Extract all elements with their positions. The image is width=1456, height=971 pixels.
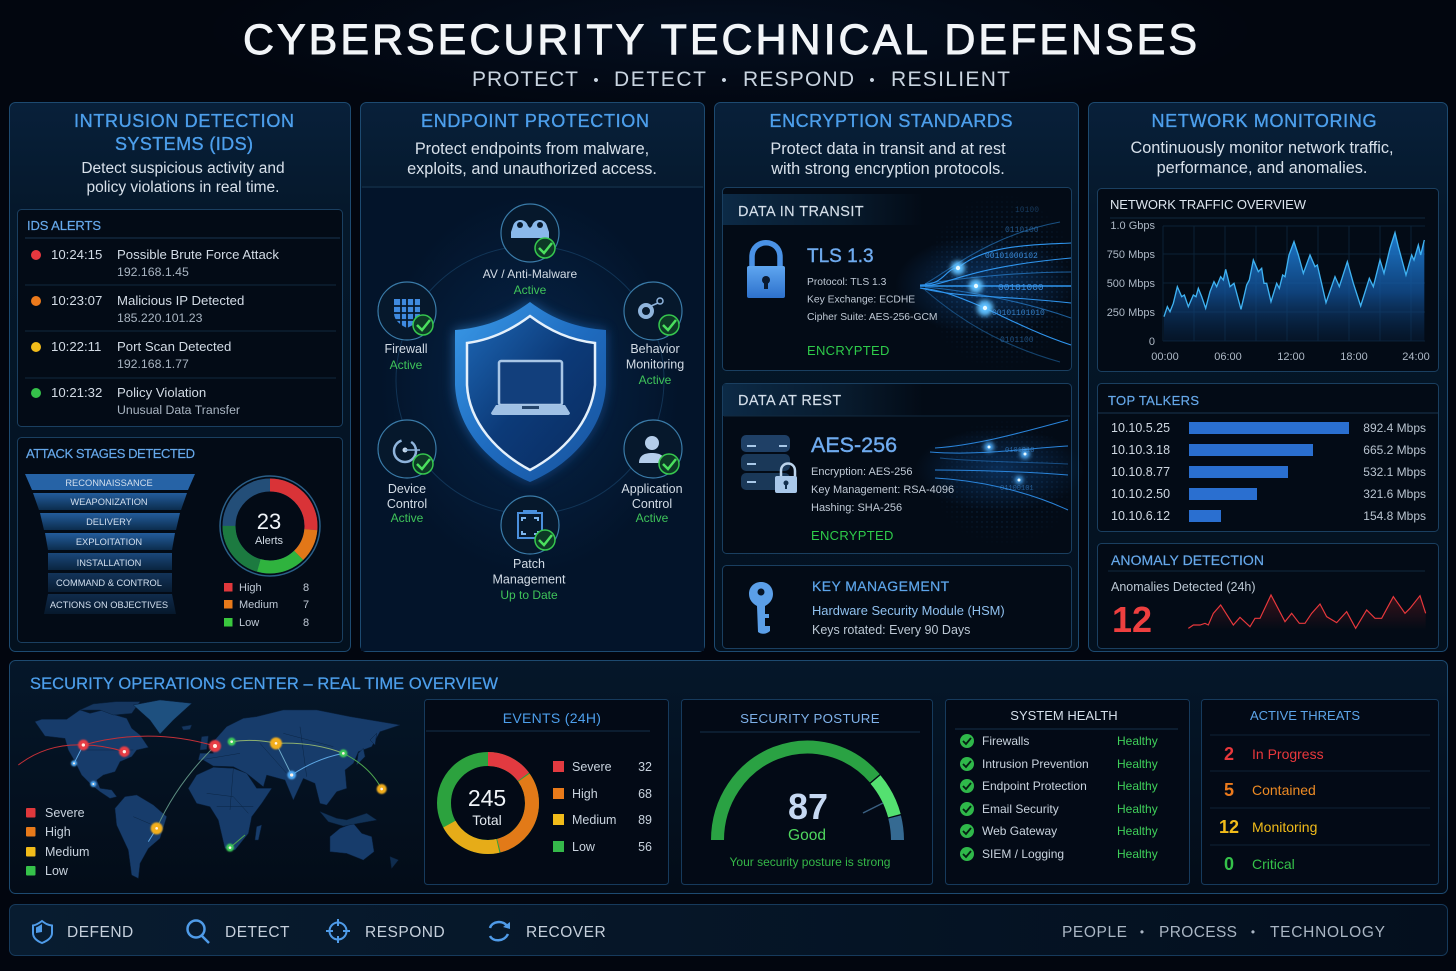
bar chart: top talkers: 10.10.5.25 <box>1111 421 1170 435</box>
description: encryption: with strong encryption protocols. <box>770 160 1005 178</box>
heading: IDS: SYSTEMS (IDS) <box>115 134 253 154</box>
alert row: port scan: 192.168.1.77 <box>117 357 189 371</box>
list: system status: Healthy <box>1117 847 1158 861</box>
card heading: system health: SYSTEM HEALTH <box>1010 708 1118 723</box>
endpoint node: patch management <box>493 496 566 602</box>
AES details: Encryption: AES-256 <box>811 466 913 478</box>
endpoint node: patch management: Patch <box>513 557 545 571</box>
key management heading: KEY MANAGEMENT <box>812 578 950 594</box>
legend: alerts: High <box>239 582 262 594</box>
anomaly count: 12 <box>1112 599 1152 640</box>
area chart: network traffic: 750 Mbps <box>1107 249 1155 261</box>
endpoint node: behavior monitoring: Active <box>639 373 672 387</box>
bar chart: top talkers: 154.8 Mbps <box>1363 509 1426 523</box>
subtitle: • <box>721 72 727 89</box>
funnel: attack stages <box>25 474 195 614</box>
subtitle: PROTECT <box>472 68 578 91</box>
heading: endpoint: ENDPOINT PROTECTION <box>421 111 649 131</box>
icon: database with padlock <box>741 435 797 493</box>
card: key management: Keys rotated: Every 90 Days <box>812 623 970 637</box>
icon: respond crosshair <box>326 919 350 943</box>
subtitle: • <box>593 72 599 89</box>
donut centre value: 23 <box>257 509 281 534</box>
legend: map severity: High <box>45 825 71 839</box>
threat row: contained: Contained <box>1252 782 1316 798</box>
donut chart: events <box>444 759 532 847</box>
legend: events: High <box>572 787 598 801</box>
legend: alerts: 7 <box>303 599 309 611</box>
funnel: attack stages: ACTIONS ON OBJECTIVES <box>50 600 168 610</box>
alert row: port scan: Port Scan Detected <box>117 339 231 354</box>
legend: events: Severe <box>572 760 612 774</box>
posture score: 87 <box>788 786 828 827</box>
visual: data streams at rest: 0101010 <box>1005 447 1034 455</box>
card heading: data in transit: DATA IN TRANSIT <box>738 204 864 220</box>
visual: data streams in transit: 00101000 <box>998 282 1044 293</box>
area chart: network traffic: 18:00 <box>1340 351 1368 363</box>
donut centre label: Alerts <box>255 535 284 547</box>
endpoint node: application control: Application <box>621 482 683 496</box>
legend: events: 56 <box>638 840 652 854</box>
world map with threat arcs <box>18 700 400 878</box>
alert row: brute force: 192.168.1.45 <box>117 265 189 279</box>
description: endpoint: exploits, and unauthorized access. <box>407 160 657 178</box>
visual: data streams in transit: 00101101010 <box>992 309 1045 318</box>
tagline: PROCESS <box>1159 924 1237 941</box>
card: events 24h <box>424 700 668 884</box>
list: system status: Healthy <box>1117 779 1158 793</box>
card heading: attack stages: ATTACK STAGES DETECTED <box>26 446 195 461</box>
description: IDS: policy violations in real time. <box>87 179 279 196</box>
card: data at rest <box>722 384 1085 554</box>
posture note: Your security posture is strong <box>730 855 890 869</box>
heading: SOC: SECURITY OPERATIONS CENTER – REAL TIME OVERVIEW <box>30 675 498 693</box>
endpoint node: device control <box>378 420 436 525</box>
bar chart: top talkers: 532.1 Mbps <box>1363 465 1426 479</box>
alert row: policy violation: Policy Violation <box>117 385 206 400</box>
icon: defend shield <box>33 921 52 943</box>
threat row: critical: Critical <box>1252 856 1295 872</box>
panel: intrusion detection systems <box>10 102 350 652</box>
alert row: port scan <box>31 339 231 371</box>
legend: alerts: 8 <box>303 582 309 594</box>
area chart: network traffic: 12:00 <box>1277 351 1305 363</box>
panel: encryption standards <box>714 102 1085 652</box>
subtitle <box>472 68 1010 91</box>
endpoint node: behavior monitoring: Monitoring <box>626 358 684 372</box>
icon: recover arrows <box>490 922 510 940</box>
bar chart: top talkers <box>1111 421 1426 523</box>
icon: padlock <box>747 243 785 298</box>
description: endpoint: Protect endpoints from malware, <box>415 140 649 158</box>
card heading: anomaly detection: ANOMALY DETECTION <box>1111 552 1264 568</box>
legend: map severity: Medium <box>45 845 89 859</box>
card: security posture <box>682 700 932 884</box>
status: encrypted at rest: ENCRYPTED <box>811 528 894 543</box>
legend: alerts: Medium <box>239 599 278 611</box>
list: system status <box>960 734 1158 861</box>
legend: events: Medium <box>572 813 616 827</box>
TLS details: Key Exchange: ECDHE <box>807 294 915 306</box>
list: system status: Email Security <box>982 802 1059 816</box>
area chart: network traffic: 250 Mbps <box>1107 307 1155 319</box>
alert row: malicious IP <box>31 293 244 325</box>
threat row: monitoring <box>1219 817 1317 837</box>
legend: events: 89 <box>638 813 652 827</box>
TLS details: Protocol: TLS 1.3 <box>807 277 886 288</box>
endpoint node: firewall <box>378 282 436 372</box>
donut centre label: events: Total <box>472 812 502 828</box>
threat row: critical <box>1224 854 1295 874</box>
alert row: port scan: 10:22:11 <box>51 339 101 354</box>
threat row: critical: 0 <box>1224 854 1234 874</box>
card: active threats <box>1202 700 1438 884</box>
legend: alerts <box>224 582 309 629</box>
funnel: attack stages: EXPLOITATION <box>76 537 142 547</box>
endpoint node: firewall: Firewall <box>384 342 428 356</box>
area chart: network traffic <box>1107 220 1430 363</box>
funnel: attack stages: INSTALLATION <box>77 558 141 568</box>
key management details: Hardware Security Module (HSM) <box>812 603 1005 618</box>
card heading: active threats: ACTIVE THREATS <box>1250 708 1360 723</box>
status: encrypted: ENCRYPTED <box>807 343 890 358</box>
endpoint node: application control: Active <box>636 511 669 525</box>
endpoint node: firewall: Active <box>390 358 423 372</box>
visual: data streams in transit <box>906 202 1072 362</box>
endpoint node: device control: Active <box>391 511 424 525</box>
endpoint node: behavior monitoring: Behavior <box>630 342 680 356</box>
gauge: security posture <box>718 747 898 840</box>
label: detect: DETECT <box>225 924 290 941</box>
alert row: malicious IP: Malicious IP Detected <box>117 293 244 308</box>
title: CYBERSECURITY TECHNICAL DEFENSES <box>243 16 1197 64</box>
posture rating: Good <box>788 827 826 844</box>
sparkline: anomalies <box>1188 595 1426 630</box>
area chart: network traffic: 24:00 <box>1402 351 1430 363</box>
alert row: policy violation: Unusual Data Transfer <box>117 403 240 417</box>
endpoint node: AV / anti-malware <box>483 204 578 297</box>
area chart: network traffic: 1.0 Gbps <box>1110 220 1155 232</box>
footer bar <box>10 904 1448 956</box>
threat row: contained: 5 <box>1224 780 1234 800</box>
threat row: monitoring: Monitoring <box>1252 819 1317 835</box>
tagline <box>1062 924 1385 941</box>
icon: central shield with laptop <box>455 302 606 482</box>
tagline: PEOPLE <box>1062 924 1127 941</box>
card: attack stages detected <box>18 438 342 642</box>
list: system status: Web Gateway <box>982 824 1057 838</box>
legend: events: Low <box>572 840 596 854</box>
list: system status: Endpoint Protection <box>982 779 1087 793</box>
description: encryption: Protect data in transit and at rest <box>770 140 1006 158</box>
TLS heading: TLS 1.3 <box>807 246 874 267</box>
card: key management <box>722 566 1072 648</box>
threat row: in progress: 2 <box>1224 744 1234 764</box>
subtitle: • <box>869 72 875 89</box>
card: IDS alerts <box>18 210 342 426</box>
anomaly caption: Anomalies Detected (24h) <box>1111 580 1256 594</box>
label: respond: RESPOND <box>365 924 445 941</box>
panel: network monitoring <box>1088 102 1448 652</box>
card heading: data at rest: DATA AT REST <box>738 393 842 409</box>
endpoint node: behavior monitoring <box>624 282 684 387</box>
area chart: network traffic: 500 Mbps <box>1107 278 1155 290</box>
heading: IDS <box>74 111 294 154</box>
alert row: malicious IP: 10:23:07 <box>51 293 102 308</box>
AES details: Key Management: RSA-4096 <box>811 484 954 496</box>
card: network traffic overview <box>1098 188 1438 372</box>
endpoint node: patch management: Up to Date <box>500 588 558 602</box>
area chart: network traffic: 06:00 <box>1214 351 1242 363</box>
funnel: attack stages: RECONNAISSANCE <box>65 478 153 488</box>
list: system status: SIEM / Logging <box>982 847 1064 861</box>
subtitle: RESPOND <box>743 68 854 91</box>
card heading: traffic: NETWORK TRAFFIC OVERVIEW <box>1110 197 1307 212</box>
icon: key <box>749 582 773 634</box>
endpoint node: device control: Control <box>387 497 427 511</box>
list: system status: Healthy <box>1117 802 1158 816</box>
alert row: brute force: 10:24:15 <box>51 247 102 262</box>
label: defend: DEFEND <box>67 924 134 941</box>
donut centre value: events: 245 <box>468 785 506 811</box>
legend: events <box>553 760 652 854</box>
funnel: attack stages: DELIVERY <box>86 517 132 527</box>
list: system status: Firewalls <box>982 734 1029 748</box>
donut chart: 23 alerts <box>220 476 320 576</box>
visual: data streams in transit: 10100 <box>1015 206 1039 215</box>
card: system health <box>946 700 1190 884</box>
subtitle: RESILIENT <box>891 68 1010 91</box>
card heading: events: EVENTS (24H) <box>503 710 601 726</box>
threat row: contained <box>1224 780 1316 800</box>
area chart: network traffic: 00:00 <box>1151 351 1179 363</box>
alert row: brute force <box>31 247 279 279</box>
threat row: in progress <box>1224 744 1324 764</box>
description: network: performance, and anomalies. <box>1157 159 1367 177</box>
legend: events: 32 <box>638 760 652 774</box>
legend: alerts: Low <box>239 617 259 629</box>
card: top talkers <box>1098 384 1438 532</box>
legend: map severity: Low <box>45 864 69 878</box>
list: system status: Healthy <box>1117 734 1158 748</box>
alert row: policy violation <box>31 385 240 417</box>
funnel: attack stages: COMMAND & CONTROL <box>56 578 162 588</box>
bar chart: top talkers: 892.4 Mbps <box>1363 421 1426 435</box>
visual: data streams at rest <box>926 420 1073 542</box>
visual: data streams in transit: 0101100 <box>1000 336 1034 345</box>
visual: data streams in transit: 0110100 <box>1005 226 1039 235</box>
AES heading: AES-256 <box>811 433 897 457</box>
tagline: • <box>1140 925 1144 939</box>
card: data in transit <box>722 188 1075 370</box>
list: system status: Healthy <box>1117 824 1158 838</box>
card heading: IDS alerts: IDS ALERTS <box>27 218 101 233</box>
bar chart: top talkers: 10.10.6.12 <box>1111 509 1170 523</box>
subtitle: DETECT <box>614 68 706 91</box>
AES details: Hashing: SHA-256 <box>811 502 902 514</box>
funnel: attack stages: WEAPONIZATION <box>70 497 148 507</box>
tagline: • <box>1251 925 1255 939</box>
panel: endpoint protection <box>360 102 704 652</box>
area chart: network traffic: 0 <box>1149 336 1155 348</box>
legend: map severity: Severe <box>45 806 85 820</box>
threat row: in progress: In Progress <box>1252 746 1324 762</box>
endpoint node: device control: Device <box>388 482 426 496</box>
card heading: top talkers: TOP TALKERS <box>1108 393 1199 408</box>
endpoint node: AV / anti-malware: Active <box>514 283 547 297</box>
legend: alerts: 8 <box>303 617 309 629</box>
heading: encryption: ENCRYPTION STANDARDS <box>770 111 1012 131</box>
list: system status: Intrusion Prevention <box>982 757 1089 771</box>
bar chart: top talkers: 10.10.2.50 <box>1111 487 1170 501</box>
alert row: policy violation: 10:21:32 <box>51 385 102 400</box>
endpoint node: application control: Control <box>632 497 672 511</box>
icon: detect magnifier <box>188 920 209 943</box>
label: recover: RECOVER <box>526 924 606 941</box>
panel: security operations center <box>10 660 1448 894</box>
legend: map severity <box>26 806 89 878</box>
threat row: monitoring: 12 <box>1219 817 1239 837</box>
endpoint node: application control <box>621 420 683 525</box>
visual: data streams at rest: 01100101 <box>1000 485 1034 493</box>
visual: data streams in transit: 00101000102 <box>985 252 1038 261</box>
card heading: posture: SECURITY POSTURE <box>740 711 880 726</box>
bar chart: top talkers: 10.10.3.18 <box>1111 443 1170 457</box>
bar chart: top talkers: 321.6 Mbps <box>1363 487 1426 501</box>
endpoint node: AV / anti-malware: AV / Anti-Malware <box>483 267 578 281</box>
TLS details: Cipher Suite: AES-256-GCM <box>807 312 937 323</box>
bar chart: top talkers: 10.10.8.77 <box>1111 465 1170 479</box>
bar chart: top talkers: 665.2 Mbps <box>1363 443 1426 457</box>
legend: events: 68 <box>638 787 652 801</box>
alert row: brute force: Possible Brute Force Attack <box>117 247 279 262</box>
tagline: TECHNOLOGY <box>1270 924 1385 941</box>
list: system status: Healthy <box>1117 757 1158 771</box>
description: network: Continuously monitor network traffic, <box>1130 139 1394 157</box>
card: anomaly detection <box>1098 544 1438 648</box>
description: IDS: Detect suspicious activity and <box>81 160 285 177</box>
heading: IDS: INTRUSION DETECTION <box>74 111 294 131</box>
endpoint node: patch management: Management <box>493 572 566 586</box>
alert row: malicious IP: 185.220.101.23 <box>117 311 203 325</box>
heading: network: NETWORK MONITORING <box>1152 111 1376 131</box>
